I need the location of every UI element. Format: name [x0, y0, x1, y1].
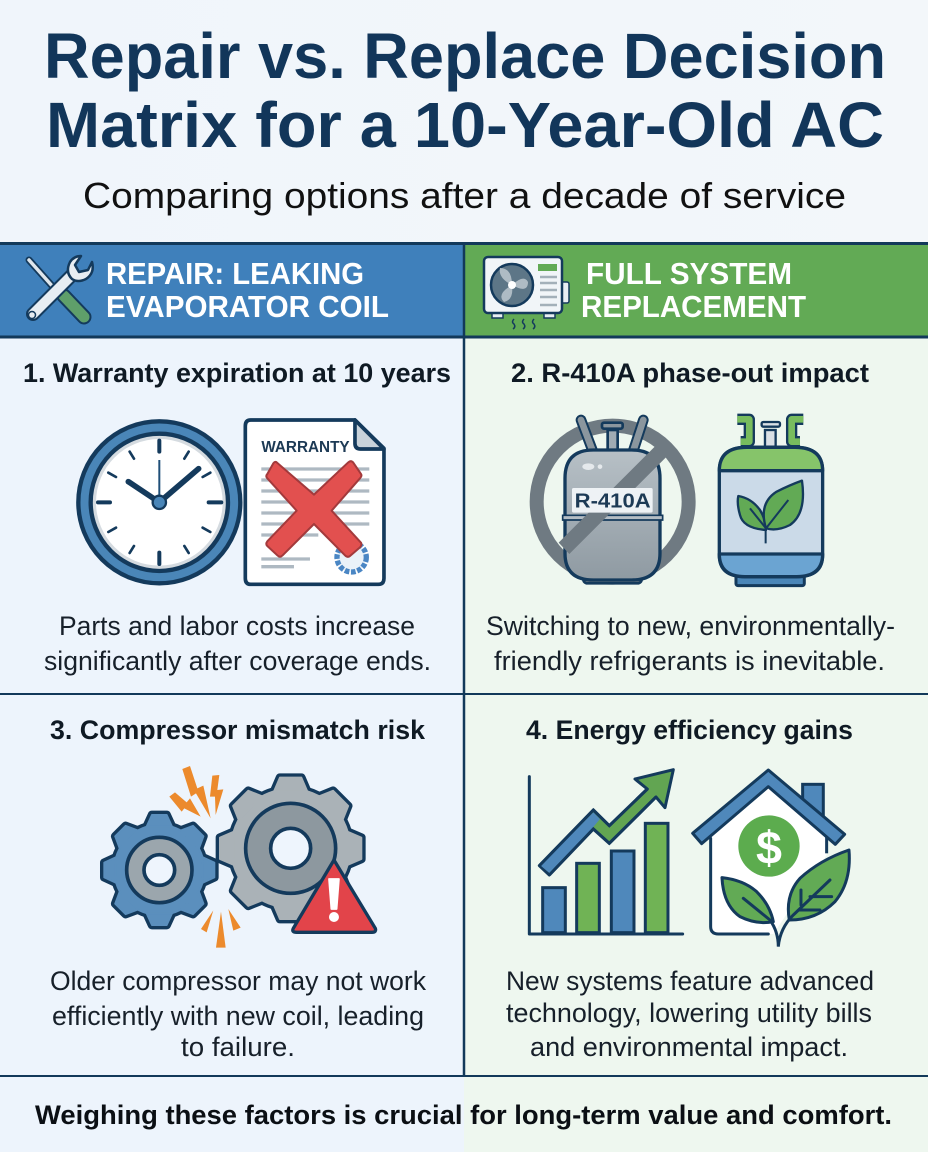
body text 4 — [506, 966, 874, 1062]
panel: warranty expiration — [23, 358, 451, 676]
body text 4: technology, lowering utility bills — [506, 998, 872, 1028]
header text: repair: EVAPORATOR COIL — [106, 289, 389, 324]
header text: repair: REPAIR: LEAKING — [106, 256, 364, 291]
heading 4: 4. Energy efficiency gains — [526, 715, 853, 745]
icon: voided warranty document: WARRANTY — [261, 439, 350, 456]
icon: banned R-410A cylinder: R-410A — [575, 490, 651, 513]
body text 3: efficiently with new coil, leading — [52, 1001, 424, 1031]
icon: banned R-410A cylinder — [537, 420, 689, 583]
warning triangle — [293, 860, 376, 932]
header text: replacement — [581, 256, 806, 324]
heading 1: 1. Warranty expiration at 10 years — [23, 358, 451, 388]
heading 3: 3. Compressor mismatch risk — [50, 715, 426, 745]
footer callout: Weighing these factors is crucial for long-term value and comfort. — [35, 1100, 892, 1130]
header text: replacement: FULL SYSTEM — [586, 256, 792, 291]
body text 2: Switching to new, environmentally- — [486, 611, 895, 641]
body text 4: New systems feature advanced — [506, 966, 874, 996]
sparks — [169, 766, 241, 948]
body text 1: significantly after coverage ends. — [44, 646, 431, 676]
small blue gear — [104, 815, 214, 925]
body text 3 — [50, 966, 426, 1062]
icon: wrench and screwdriver — [28, 256, 93, 318]
panel: replacement header — [464, 243, 928, 337]
subtitle: Comparing options after a decade of service — [83, 175, 846, 216]
icon: mismatched gears with warning — [104, 766, 376, 948]
panel: refrigerant phase-out — [486, 358, 895, 676]
icon: AC outdoor unit — [484, 257, 569, 329]
icon: eco refrigerant cylinder — [719, 419, 823, 586]
panel: compressor mismatch — [50, 715, 426, 1062]
body text 1 — [44, 611, 431, 676]
icon: rising bar chart — [529, 770, 683, 934]
header text: repair — [106, 256, 389, 324]
body text 3: Older compressor may not work — [50, 966, 426, 996]
body text 1: Parts and labor costs increase — [59, 611, 415, 641]
body text 2: friendly refrigerants is inevitable. — [494, 646, 885, 676]
panel: energy efficiency — [506, 715, 874, 1062]
heading 2: 2. R-410A phase-out impact — [511, 358, 869, 388]
large gray gear — [220, 778, 361, 919]
icon: house with dollar and leaves — [693, 770, 849, 947]
title: Matrix for a 10-Year-Old AC — [46, 89, 884, 161]
body text 2 — [486, 611, 895, 676]
icon: voided warranty document — [245, 420, 384, 584]
grid lines — [0, 243, 928, 1076]
title — [44, 20, 886, 161]
body text 3: to failure. — [181, 1032, 295, 1062]
body text 4: and environmental impact. — [530, 1032, 848, 1062]
title: Repair vs. Replace Decision — [44, 20, 886, 92]
panel: repair header — [0, 243, 464, 337]
header text: replacement: REPLACEMENT — [581, 289, 806, 324]
icon: clock — [78, 421, 240, 583]
icon: house with dollar and leaves: $ — [756, 821, 782, 873]
